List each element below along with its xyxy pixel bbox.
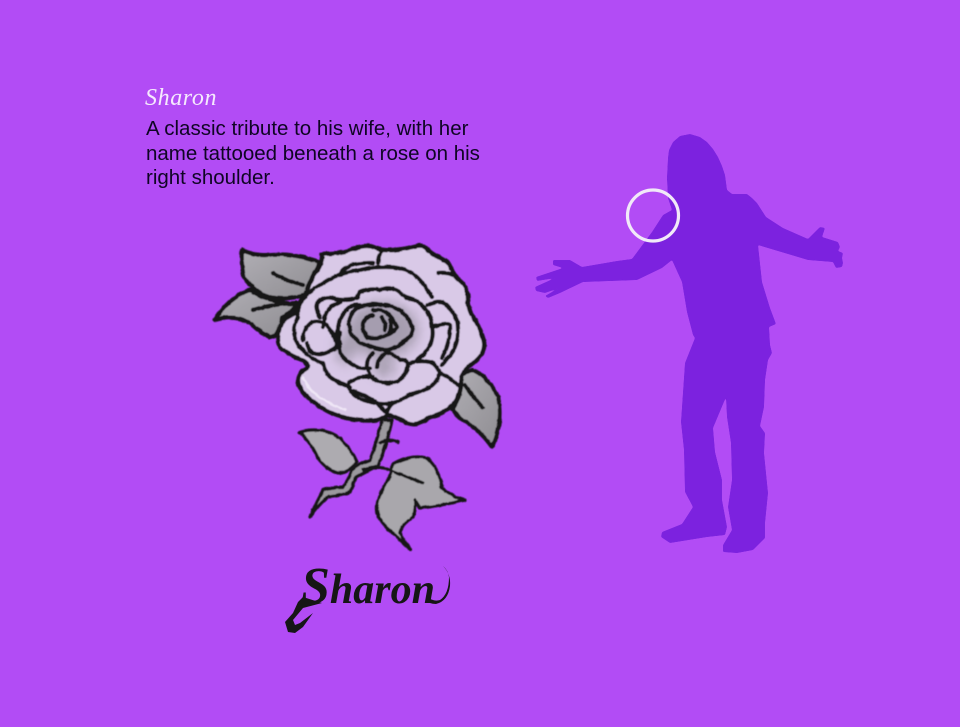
highlight (303, 378, 345, 410)
body silhouette (535, 134, 843, 553)
description text: A classic tribute to his wife, with her (146, 117, 468, 140)
tattoo lettering (285, 558, 450, 633)
title: Sharon (145, 85, 217, 111)
stem (310, 420, 398, 517)
rose tattoo (215, 246, 500, 549)
description text: name tattooed beneath a rose on his (146, 142, 480, 164)
description text (146, 117, 480, 189)
petal shading (336, 302, 418, 377)
lettering swashes (285, 597, 322, 633)
leaf: lower left of stem (299, 430, 357, 473)
petal lines (294, 251, 460, 413)
leaf: upper left (242, 250, 320, 298)
description text: right shoulder. (146, 166, 275, 189)
rose bloom (278, 246, 484, 424)
tattoo lettering: Sharon (301, 558, 435, 615)
leaf: lower left (215, 290, 298, 337)
leaf: lower right of stem (363, 457, 465, 549)
leaf: right (452, 370, 500, 447)
location ring on right shoulder (628, 190, 678, 241)
